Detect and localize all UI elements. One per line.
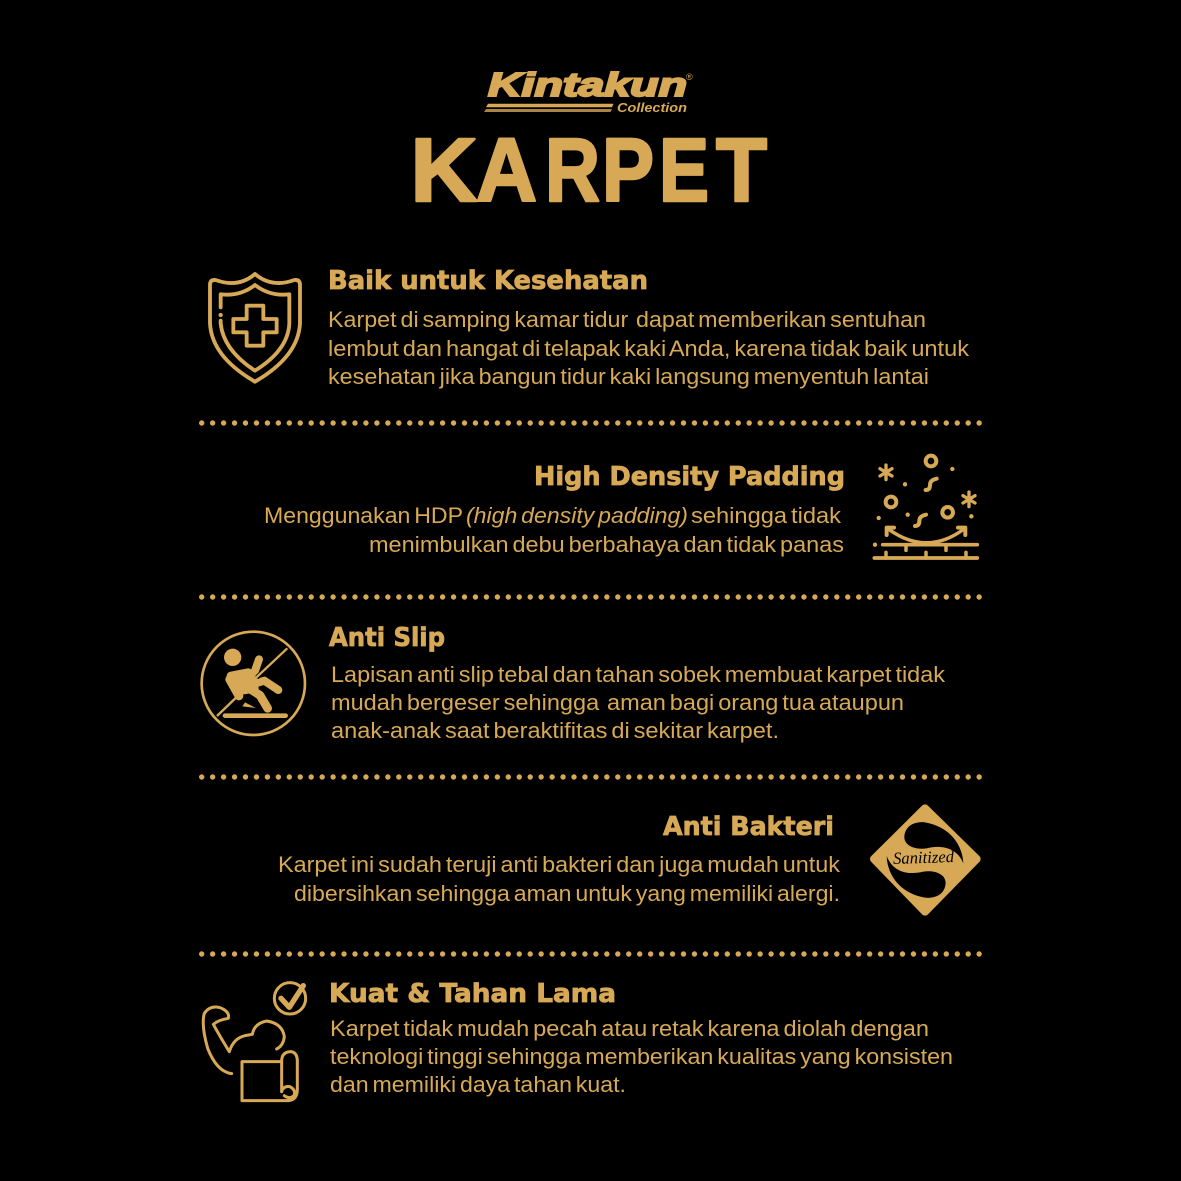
icon: health shield bbox=[210, 274, 300, 382]
panel: High Density Padding bbox=[264, 456, 977, 558]
title bbox=[410, 121, 767, 221]
panel: Anti Bakteri bbox=[278, 808, 977, 912]
text block bbox=[264, 503, 844, 557]
text block bbox=[330, 1016, 953, 1097]
text block bbox=[328, 307, 970, 389]
text block: Karpet di samping kamar tidur dapat memberikan sentuhan bbox=[328, 307, 926, 332]
logo: Kintakun Collection: ® bbox=[686, 72, 693, 82]
panel: Baik untuk Kesehatan bbox=[210, 266, 970, 389]
text block: anak-anak saat beraktifitas di sekitar karpet. bbox=[331, 718, 779, 743]
heading: Kuat & Tahan Lama bbox=[329, 979, 616, 1009]
text block bbox=[331, 662, 946, 743]
text block: lembut dan hangat di telapak kaki Anda, karena tidak baik untuk bbox=[328, 336, 970, 361]
heading: Anti Slip bbox=[329, 623, 445, 653]
title: A bbox=[476, 121, 537, 221]
text block: sehingga tidak bbox=[691, 503, 842, 528]
icon: dust particles over padding bbox=[874, 456, 977, 558]
text block: (high density padding) bbox=[466, 503, 688, 528]
logo: Kintakun Collection bbox=[484, 66, 693, 115]
icon: no slipping sign bbox=[202, 632, 305, 735]
icon: Sanitized badge bbox=[874, 808, 977, 912]
text block: Karpet ini sudah teruji anti bakteri dan juga mudah untuk bbox=[278, 852, 841, 877]
text block: mudah bergeser sehingga aman bagi orang tua ataupun bbox=[331, 690, 904, 715]
title: P bbox=[602, 121, 654, 221]
text block: Menggunakan HDP bbox=[264, 503, 463, 528]
text block: Lapisan anti slip tebal dan tahan sobek membuat karpet tidak bbox=[331, 662, 946, 687]
text block bbox=[278, 852, 841, 906]
logo: Kintakun Collection: Collection bbox=[617, 101, 687, 115]
heading: Anti Bakteri bbox=[663, 812, 834, 842]
panel: Anti Slip bbox=[202, 623, 946, 743]
heading: Baik untuk Kesehatan bbox=[328, 266, 648, 296]
text block: dibersihkan sehingga aman untuk yang memiliki alergi. bbox=[294, 881, 840, 906]
title: K bbox=[410, 121, 478, 221]
title: R bbox=[545, 121, 600, 221]
text block: Karpet tidak mudah pecah atau retak karena diolah dengan bbox=[330, 1016, 929, 1041]
panel: Kuat & Tahan Lama bbox=[203, 979, 953, 1101]
text block: kesehatan jika bangun tidur kaki langsung menyentuh lantai bbox=[328, 364, 929, 389]
text block: dan memiliki daya tahan kuat. bbox=[330, 1072, 626, 1097]
text block: menimbulkan debu berbahaya dan tidak panas bbox=[369, 532, 844, 557]
logo: Kintakun Collection: Kintakun bbox=[488, 66, 687, 103]
icon: strong arm with carpet roll and check bbox=[203, 983, 306, 1101]
icon: Sanitized badge: Sanitized bbox=[893, 847, 955, 868]
title: E bbox=[659, 121, 709, 221]
heading: High Density Padding bbox=[534, 462, 845, 492]
title: T bbox=[716, 121, 767, 221]
text block: teknologi tinggi sehingga memberikan kualitas yang konsisten bbox=[330, 1044, 953, 1069]
